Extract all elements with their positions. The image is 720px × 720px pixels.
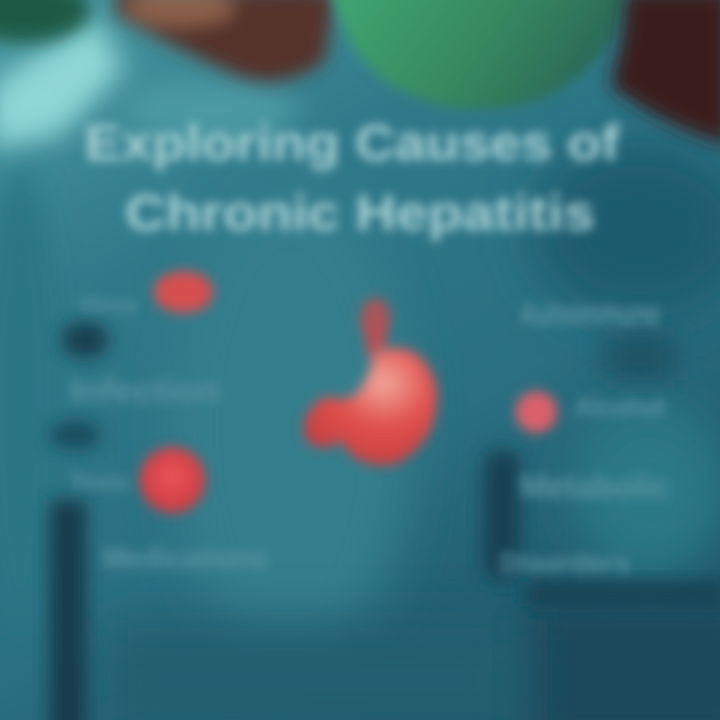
left label: bottom: Medications	[102, 542, 268, 575]
left label: top: Infection	[70, 372, 220, 410]
left label: top	[70, 292, 220, 410]
title: Exploring Causes of	[84, 115, 620, 171]
central illustration: stomach	[303, 298, 437, 465]
title	[84, 115, 620, 241]
skin / neck at top	[115, 0, 335, 81]
left label: bottom: Toxic	[70, 469, 130, 496]
title: Chronic Hepatitis	[125, 185, 595, 241]
green circular backdrop	[330, 0, 625, 110]
right labels: Alcohol	[575, 392, 665, 422]
dark maroon top-right backdrop	[610, 0, 720, 145]
icon: lower-left red circle	[139, 447, 205, 513]
left label: top: Virus	[78, 292, 138, 317]
left label: bottom	[70, 469, 268, 575]
top-left dark green backdrop	[0, 0, 90, 42]
right labels: Metabolic	[520, 468, 670, 506]
dark shirt folds	[49, 322, 720, 720]
right labels	[500, 295, 670, 578]
icon: right red circle	[515, 391, 557, 433]
right labels: Disorders	[500, 547, 630, 578]
icon: top-left red organ	[153, 271, 213, 313]
